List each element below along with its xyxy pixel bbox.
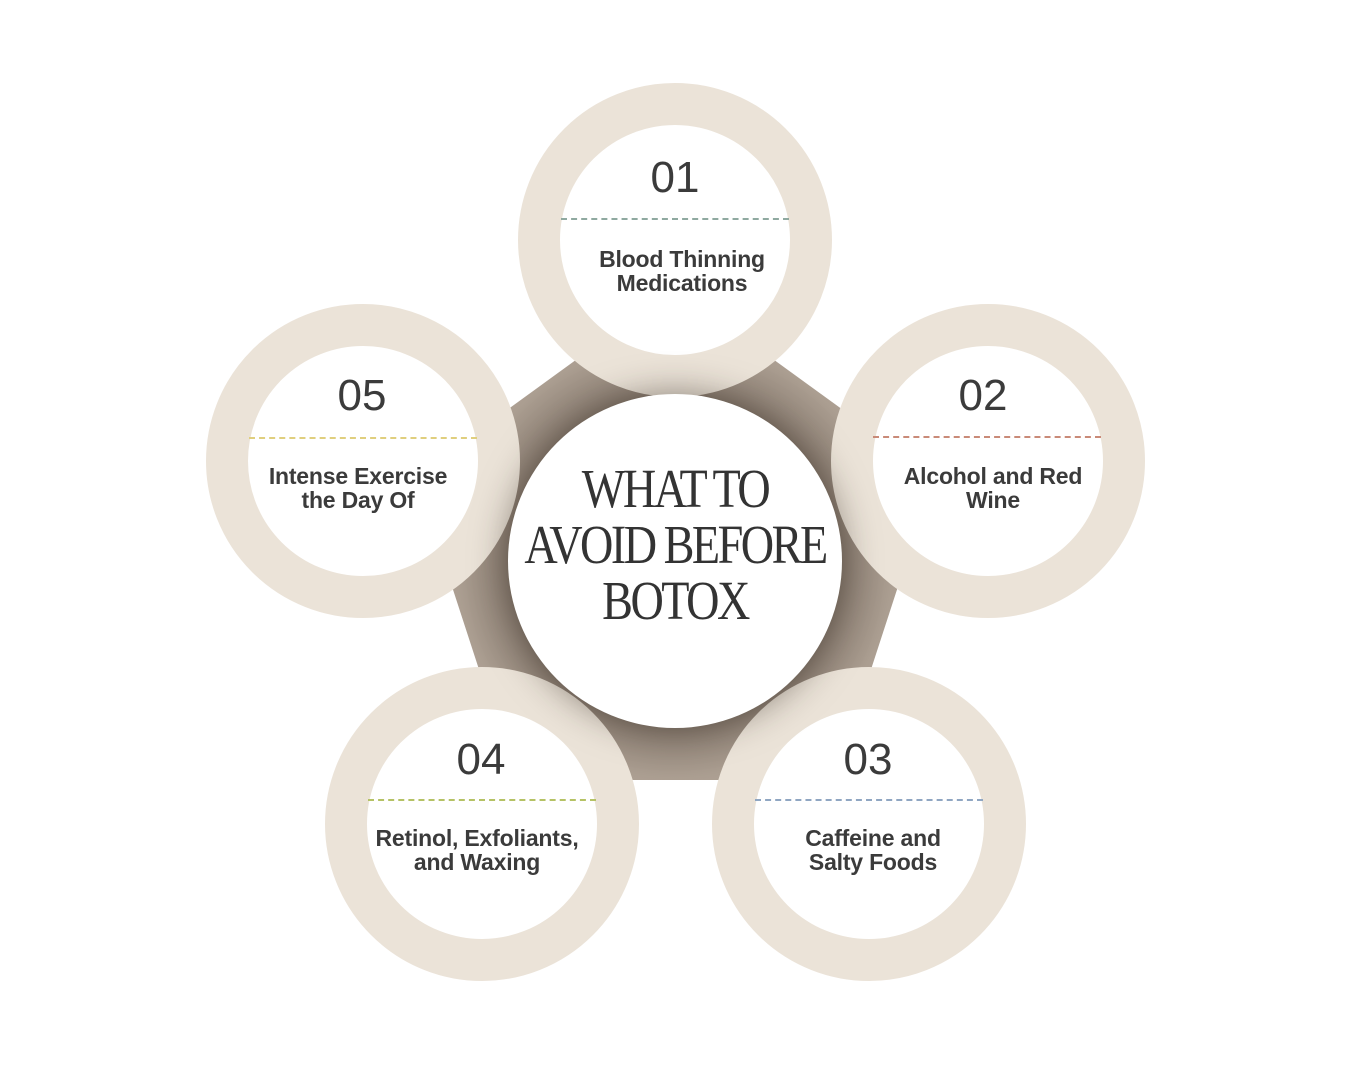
number 01: 01 — [651, 153, 699, 202]
ring 03 — [712, 667, 1026, 981]
center circle with title — [508, 394, 842, 728]
label 05: Intense Exercise — [269, 463, 447, 489]
title: BOTOX — [602, 570, 748, 631]
label 02: Wine — [966, 487, 1020, 513]
label 02 — [904, 463, 1082, 513]
ring 04 — [325, 667, 639, 981]
label 04: Retinol, Exfoliants, — [375, 825, 579, 851]
label 04: and Waxing — [414, 849, 540, 875]
ring 01 — [518, 83, 832, 397]
label 05 — [269, 463, 447, 513]
label 01 — [599, 246, 765, 296]
label 02: Alcohol and Red — [904, 463, 1082, 489]
number 05: 05 — [338, 371, 386, 420]
number 02: 02 — [959, 371, 1007, 420]
ring 02 — [831, 304, 1145, 618]
label 03: Caffeine and — [805, 825, 941, 851]
label 03 — [805, 825, 941, 875]
label 04 — [375, 825, 579, 875]
title: AVOID BEFORE — [524, 514, 826, 575]
label 03: Salty Foods — [809, 849, 937, 875]
ring 05 — [206, 304, 520, 618]
label 01: Blood Thinning — [599, 246, 765, 272]
number 03: 03 — [844, 735, 892, 784]
number 04: 04 — [457, 735, 505, 784]
label 05: the Day Of — [301, 487, 415, 513]
label 01: Medications — [617, 270, 747, 296]
title: WHAT TO — [582, 458, 768, 519]
title — [524, 458, 826, 631]
